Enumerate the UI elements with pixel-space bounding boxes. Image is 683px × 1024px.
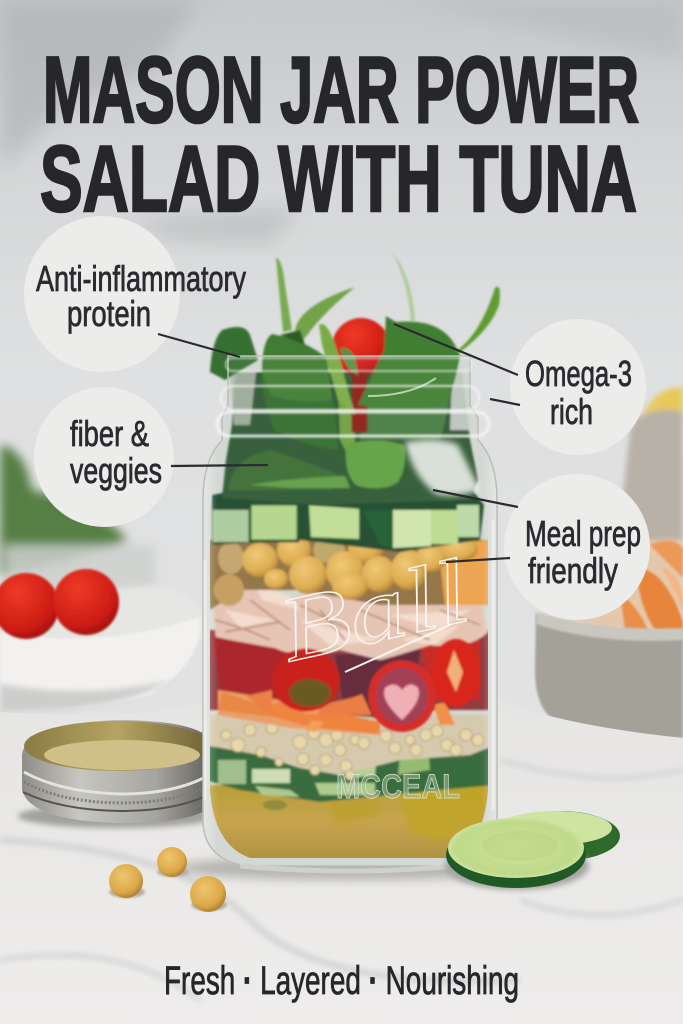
title [40, 37, 639, 231]
marble counter [0, 700, 683, 1024]
background wall [0, 0, 683, 730]
embossed jar lettering: MCCEAL [336, 768, 460, 806]
embossed jar lettering [270, 539, 478, 806]
greens filling the jar [222, 368, 480, 505]
callout: meal prep friendly [433, 474, 650, 620]
callout: fiber and veggies: veggies [70, 450, 162, 491]
layer: chickpeas [210, 538, 488, 610]
callout: omega-3 rich: rich [550, 391, 593, 432]
callout: anti-inflammatory protein [24, 216, 246, 372]
layer: tuna [212, 585, 488, 660]
cucumber slices [445, 811, 620, 890]
chickpeas on counter [109, 847, 227, 912]
layer: cucumbers upper [212, 487, 484, 552]
callout: fiber and veggies [34, 387, 268, 527]
layer: dressing [210, 783, 488, 858]
layer: quinoa [205, 715, 495, 780]
jar lid [18, 720, 218, 828]
glass highlights [203, 356, 497, 871]
callout: anti-inflammatory protein: Anti-inflammatory [36, 258, 246, 299]
footer tagline: Fresh · Layered · Nourishing [164, 959, 519, 1003]
callout bubbles and leader lines [24, 216, 650, 620]
layer: carrots [218, 690, 455, 735]
cherry tomato on top [332, 318, 390, 376]
layer: cucumbers lower [205, 742, 495, 802]
callout: omega-3 rich: Omega-3 [525, 353, 632, 394]
halved tomatoes [272, 639, 480, 732]
callout: anti-inflammatory protein: protein [67, 293, 151, 334]
embossed jar lettering: Ball [270, 539, 478, 681]
greens above the rim [210, 252, 500, 432]
jar with layered salad [203, 252, 500, 871]
callout: meal prep friendly: Meal prep [525, 513, 641, 554]
callout: omega-3 rich [394, 319, 646, 455]
jar interior backdrop [203, 356, 497, 866]
background: greens and tomatoes on white plate [0, 445, 205, 712]
callout: meal prep friendly: friendly [528, 550, 618, 591]
background: vase and carrot bowl [535, 388, 683, 739]
layer: tomatoes backdrop [205, 630, 495, 720]
callout: fiber and veggies: fiber & [70, 413, 149, 454]
